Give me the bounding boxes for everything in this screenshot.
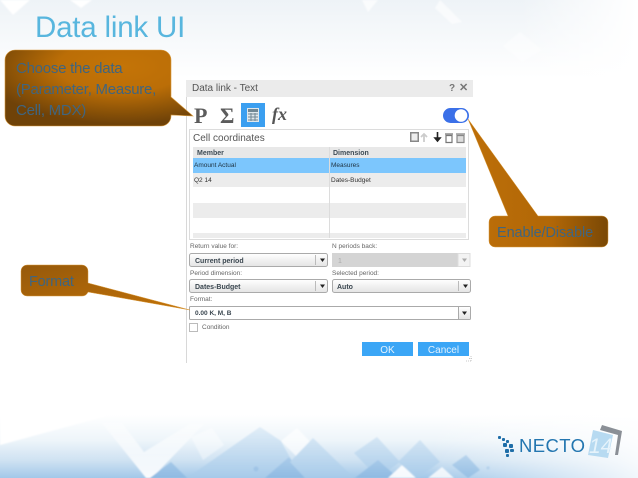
checkbox: condition: Condition	[202, 324, 230, 331]
logo book	[588, 425, 622, 458]
form fields: Format:	[190, 296, 213, 303]
table: Measures	[331, 162, 360, 169]
select: current period	[190, 254, 328, 266]
callout: format	[21, 265, 190, 310]
form fields: Selected period:	[332, 270, 379, 277]
select: selected period	[332, 280, 470, 292]
form fields	[190, 243, 470, 332]
table: Dates-Budget	[331, 177, 371, 184]
panel heading: Cell coordinates	[193, 133, 265, 144]
callout: enable/disable: Enable/Disable	[497, 225, 593, 241]
callout: enable/disable	[468, 119, 608, 247]
disabled input: N periods	[332, 253, 470, 267]
select: selected period: Auto	[337, 284, 353, 291]
logo wordmark: NECTO	[519, 435, 585, 456]
table	[193, 147, 466, 238]
checkbox: condition	[190, 324, 230, 332]
callout: choose the data: Choose the data	[16, 60, 123, 77]
disabled input: N periods: 1	[338, 258, 342, 265]
title: Data link UI	[35, 11, 185, 44]
resize grip	[466, 356, 472, 362]
icon: parameter P: P	[194, 103, 207, 128]
callout: choose the data	[5, 50, 193, 126]
table: Q2 14	[194, 177, 212, 184]
logo number: 14	[589, 435, 612, 458]
select: period dimension	[190, 280, 328, 292]
dialog: Data link - Text	[186, 80, 473, 363]
table: Member	[197, 150, 224, 157]
callout: choose the data: Cell, MDX)	[16, 102, 86, 119]
select: current period: Current period	[195, 258, 244, 265]
logo: NECTO 14	[498, 425, 622, 458]
logo dots	[498, 436, 514, 457]
dialog title bar: ?	[449, 83, 455, 94]
toggle enable/disable	[443, 108, 469, 123]
select: format: 0.00 K, M, B	[195, 310, 232, 317]
dialog title bar: ✕	[459, 82, 468, 94]
form fields: N periods back:	[332, 243, 377, 250]
table: Dimension	[333, 150, 369, 157]
select: period dimension: Dates-Budget	[195, 284, 241, 291]
dialog title bar: Data link - Text	[192, 83, 258, 94]
dialog title bar	[186, 80, 473, 97]
icon: fx: fx	[272, 104, 287, 124]
button: Cancel	[418, 342, 469, 356]
icon: calculator cell, selected	[241, 103, 265, 127]
select: format	[190, 306, 470, 320]
icon: sigma: Σ	[220, 103, 234, 128]
form fields: Return value for:	[190, 243, 238, 250]
button: Cancel: Cancel	[428, 345, 459, 356]
form fields: Period dimension:	[190, 270, 242, 277]
callout: format: Format	[29, 274, 74, 290]
button: OK	[362, 342, 413, 356]
table: Amount Actual	[194, 162, 236, 169]
callout: choose the data: (Parameter, Measure,	[16, 81, 156, 98]
panel: cell coordinates	[190, 130, 468, 240]
button: OK: OK	[380, 345, 395, 356]
toolbar icons	[410, 132, 465, 142]
